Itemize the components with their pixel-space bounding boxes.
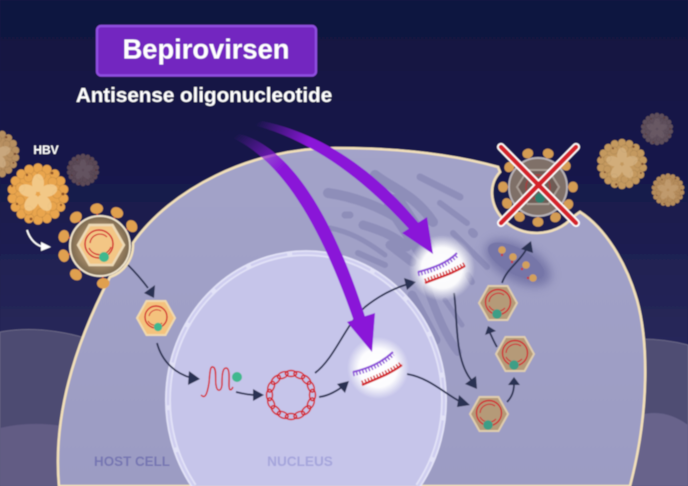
subtitle: Antisense oligonucleotide xyxy=(76,84,332,107)
arrow: virus attachment xyxy=(27,230,51,251)
host cell xyxy=(58,148,645,486)
title box xyxy=(97,26,316,76)
capsid 2 xyxy=(496,337,534,371)
HBV label: HBV xyxy=(33,143,59,157)
uncoated capsid xyxy=(137,301,175,335)
nucleus xyxy=(168,253,444,486)
glow: lower target xyxy=(347,337,409,399)
capsid 3 xyxy=(479,286,517,320)
glow: upper target xyxy=(409,235,475,301)
antisense duplex: upper xyxy=(418,253,465,283)
cccDNA ring xyxy=(266,370,316,420)
nucleus label: NUCLEUS xyxy=(267,454,333,469)
virus: right large xyxy=(596,139,648,189)
capsid 1 xyxy=(470,397,508,431)
background hills xyxy=(0,330,688,486)
virus: right dark xyxy=(640,113,674,145)
process arrows xyxy=(128,241,533,407)
purple arrow to cytoplasm xyxy=(253,121,433,254)
vesicle with budding particles xyxy=(478,230,558,296)
virus: HBV large xyxy=(7,163,69,225)
virus: right small xyxy=(651,173,685,207)
title box: Bepirovirsen xyxy=(123,34,289,64)
mRNA squiggle with protein xyxy=(201,367,242,396)
virus: dark small xyxy=(66,154,100,186)
virus: top left xyxy=(0,129,20,179)
antisense duplex: lower xyxy=(353,352,402,385)
entering virion xyxy=(57,203,140,289)
purple arrow to nucleus xyxy=(230,134,375,352)
exiting virion crossed out xyxy=(498,147,578,227)
golgi apparatus xyxy=(328,175,487,352)
red cross xyxy=(501,147,576,223)
host cell label: HOST CELL xyxy=(94,454,170,469)
